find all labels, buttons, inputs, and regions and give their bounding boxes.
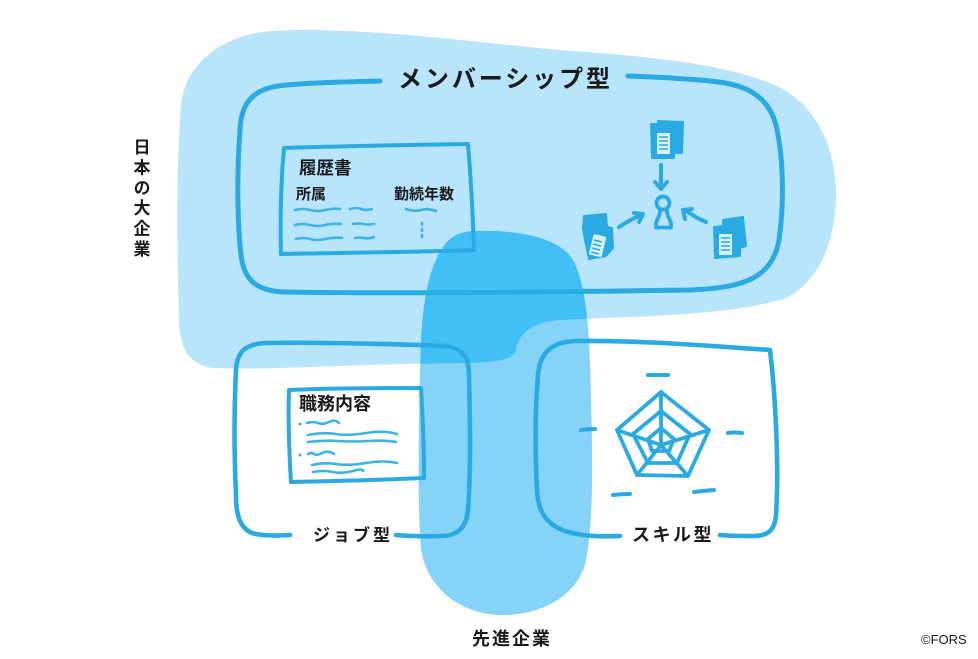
region: 先進企業 blob <box>419 231 592 615</box>
frame: メンバーシップ型 <box>238 76 782 293</box>
wavy text lines <box>295 208 436 240</box>
arrow: right document to person <box>683 209 706 222</box>
diagram: documents flowing to a person <box>583 121 746 259</box>
panel: 職務内容 card <box>289 388 424 482</box>
icon: top document stack <box>651 121 683 158</box>
region: overlap of the two blobs <box>420 230 588 364</box>
radar axis label marks <box>581 375 742 495</box>
chart: radar pentagon <box>581 375 742 495</box>
heading: メンバーシップ型: メンバーシップ型 <box>398 66 610 93</box>
label: 日本の大企業: 日本の大企業 <box>130 138 150 260</box>
arrow: left document to person <box>619 213 643 227</box>
wavy text lines <box>298 421 397 473</box>
frame: ジョブ型 <box>234 343 470 536</box>
credit: ©FORS <box>921 632 967 647</box>
radar grid <box>617 392 709 476</box>
region: 日本の大企業 blob <box>177 30 836 369</box>
card outline <box>281 144 474 254</box>
card outline <box>289 388 424 482</box>
infographic canvas <box>134 30 966 647</box>
arrow: top document to person <box>655 165 667 189</box>
panel: 履歴書 card <box>281 144 474 254</box>
card title: 履歴書 <box>299 158 352 178</box>
frame: スキル型 <box>536 341 777 536</box>
column label: 勤続年数: 勤続年数 <box>394 185 454 203</box>
column label: 所属: 所属 <box>296 186 326 203</box>
label: 先進企業: 先進企業 <box>472 629 552 649</box>
icon: person <box>656 196 671 228</box>
icon: left document stack <box>583 214 613 259</box>
card title: 職務内容 <box>299 394 371 414</box>
heading: ジョブ型: ジョブ型 <box>313 525 393 545</box>
heading: スキル型: スキル型 <box>632 525 714 545</box>
icon: right document stack <box>714 217 746 258</box>
